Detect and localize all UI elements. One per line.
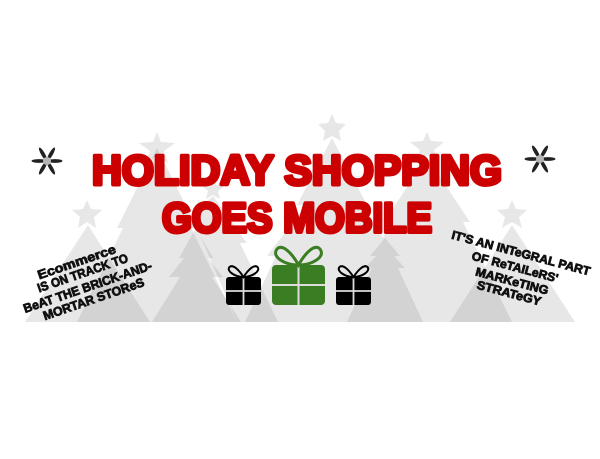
- title: GOES MOBILE: [162, 194, 432, 241]
- icon: green gift centre: [272, 247, 325, 305]
- text block: retailers: OF ReTAILeRS': [470, 249, 560, 285]
- text block: retailers: MARKeTING: [474, 265, 550, 298]
- icon: black gift right: [336, 266, 371, 305]
- icon: snowflake left: [32, 147, 62, 175]
- text block: ecommerce: BeAT THE BRICK-AND-: [22, 259, 154, 316]
- text block: retailers: [450, 228, 593, 308]
- text block: ecommerce: MORTAR STOReS: [41, 275, 146, 323]
- background: christmas trees: [25, 114, 575, 322]
- text block: retailers: IT'S AN INTeGRAL PART: [450, 228, 593, 279]
- text block: ecommerce: IS ON TRACK TO: [36, 251, 130, 295]
- title: HOLIDAY SHOPPING: [92, 146, 502, 194]
- text block: retailers: STRATeGY: [475, 278, 543, 308]
- title: [92, 146, 502, 241]
- icon: black gift left: [226, 266, 261, 305]
- text block: ecommerce: Ecommerce: [36, 242, 118, 282]
- icon: snowflake right: [524, 145, 556, 173]
